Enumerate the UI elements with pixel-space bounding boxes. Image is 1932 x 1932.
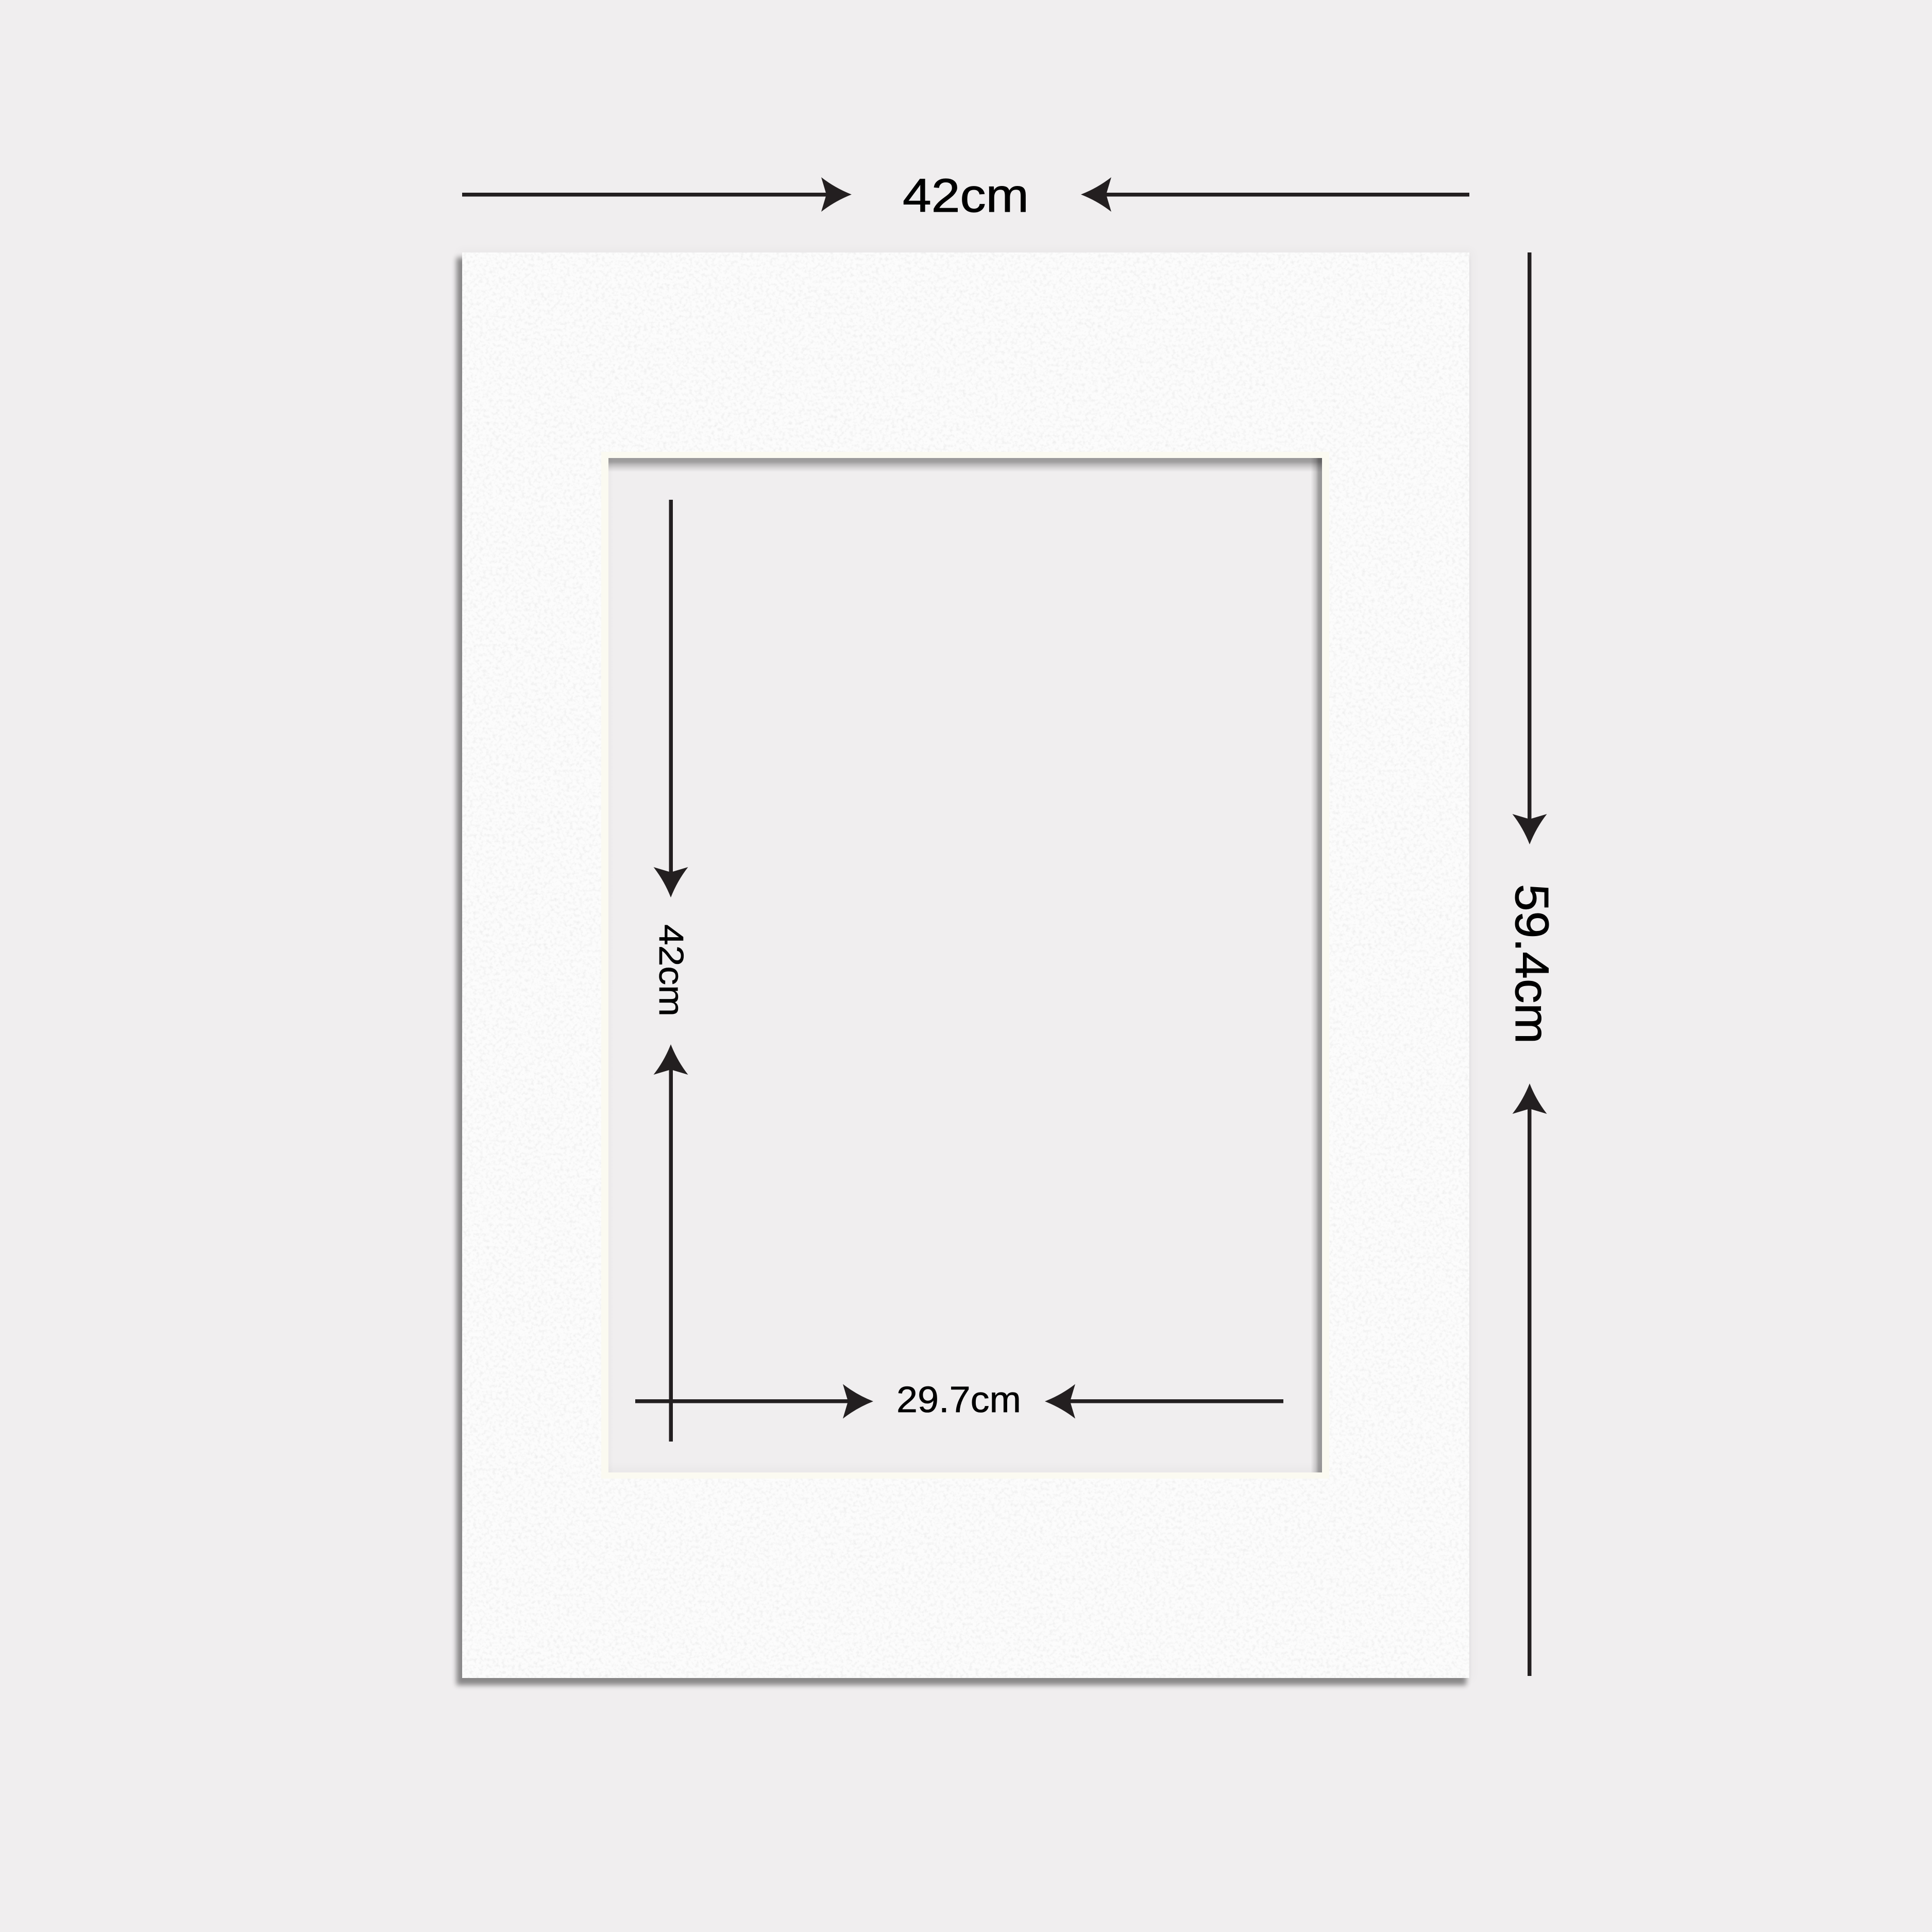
label: 42cm window height: 42cm <box>652 924 690 1016</box>
arrow: window height pointing down <box>653 500 688 897</box>
arrow: right side pointing up <box>1513 1083 1547 1676</box>
top dimension: 42cm <box>462 170 1469 222</box>
arrow: top right pointing left <box>1081 177 1469 212</box>
arrow: top left pointing right <box>462 177 852 212</box>
panel: white mat board with window <box>456 249 1473 1685</box>
label: 42cm outer width: 42cm <box>903 170 1029 222</box>
arrow: window width pointing left <box>1045 1384 1283 1419</box>
label: 29.7cm window width: 29.7cm <box>896 1380 1021 1420</box>
inner dimension: 29.7cm window width <box>635 1380 1283 1420</box>
arrow: window width pointing right <box>635 1384 873 1419</box>
label: 59.4cm outer height: 59.4cm <box>1505 884 1558 1044</box>
right dimension: 59.4cm <box>1505 252 1558 1676</box>
arrow: right side pointing down <box>1513 252 1547 844</box>
inner dimension: 42cm window height <box>652 500 690 1442</box>
arrow: window height pointing up <box>653 1044 688 1442</box>
